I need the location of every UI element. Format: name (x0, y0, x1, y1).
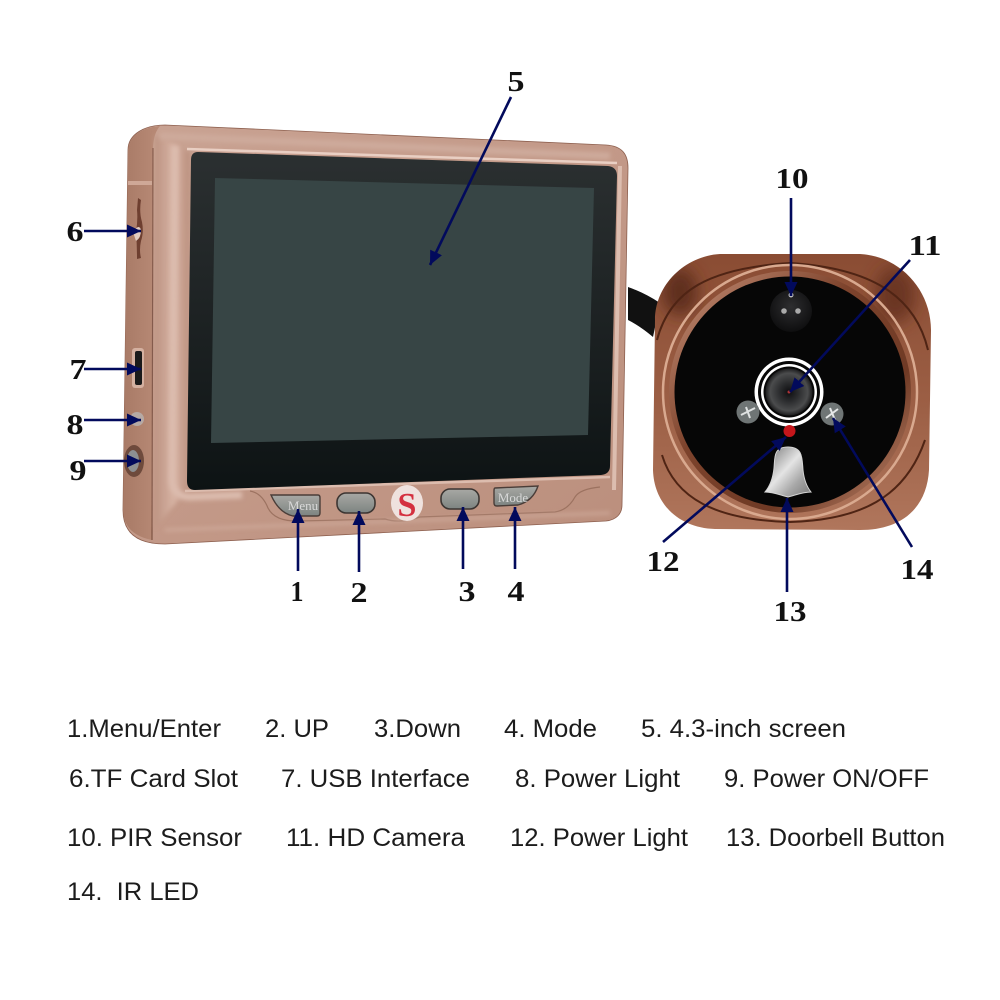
up button (337, 493, 375, 513)
power light (130, 412, 144, 426)
number 5: 5 (508, 66, 524, 98)
number 14: 14 (900, 554, 934, 586)
legend row 3: 13. Doorbell Button (726, 824, 945, 852)
legend row 1: 1.Menu/Enter (67, 715, 221, 743)
IR LED right (820, 402, 844, 426)
callout numbers (66, 66, 942, 628)
number 9: 9 (70, 455, 86, 487)
monitor side panel (123, 126, 160, 540)
monitor device: Mode (498, 490, 528, 505)
bezel highlights (172, 146, 242, 497)
number 6: 6 (66, 216, 84, 248)
arrow 7 (84, 368, 141, 370)
number 12: 12 (646, 546, 680, 578)
legend row 1: 4. Mode (504, 715, 597, 743)
number 10: 10 (776, 163, 808, 195)
legend row 2: 9. Power ON/OFF (724, 765, 929, 793)
power switch (124, 445, 144, 477)
arrows (84, 97, 912, 592)
cable (628, 287, 660, 337)
camera lens (754, 358, 824, 426)
menu button (271, 495, 320, 516)
USB interface (132, 348, 144, 388)
arrow 3 (462, 507, 464, 569)
number 7: 7 (70, 354, 86, 386)
number 8: 8 (66, 409, 84, 441)
black face (674, 276, 906, 508)
housing outlines (657, 263, 928, 350)
arrow 6 (84, 230, 141, 232)
arrow 8 (84, 419, 141, 421)
arrow 10 (790, 198, 792, 296)
monitor body (123, 125, 628, 544)
number 3: 3 (458, 576, 476, 608)
number 2: 2 (350, 577, 368, 609)
legend row 3 (67, 824, 945, 852)
legend row 2 (69, 765, 929, 793)
logo badge (391, 485, 423, 524)
monitor device: Menu (288, 498, 319, 513)
legend row 2: 6.TF Card Slot (69, 765, 238, 793)
PIR sensor (770, 290, 812, 332)
logo badge: S (398, 487, 416, 524)
number 4: 4 (508, 576, 524, 608)
TF card slot (136, 198, 143, 259)
number 11: 11 (908, 230, 942, 262)
legend row 1: 2. UP (265, 715, 329, 743)
legend row 1 (67, 715, 846, 743)
IR LED left (736, 400, 760, 424)
monitor device (123, 125, 628, 544)
legend row 3: 10. PIR Sensor (67, 824, 242, 852)
arrow 2 (358, 511, 360, 572)
highlight ring (663, 265, 917, 519)
arrow 12 (663, 437, 786, 542)
legend row 3: 11. HD Camera (286, 824, 465, 852)
legend row 1: 3.Down (374, 715, 461, 743)
doorbell button (765, 447, 811, 497)
arrow 11 (790, 260, 910, 392)
legend row 4: 14. IR LED (67, 878, 199, 906)
arrow 9 (84, 460, 141, 462)
arrow 13 (786, 498, 788, 592)
legend row 1: 5. 4.3-inch screen (641, 715, 846, 743)
bottom contour (250, 487, 600, 521)
legend row 2: 7. USB Interface (281, 765, 470, 793)
number 13: 13 (774, 596, 806, 628)
legend row 2: 8. Power Light (515, 765, 680, 793)
power indicator (784, 425, 796, 437)
doorbell unit (653, 254, 931, 530)
display area (211, 178, 594, 443)
arrow 1 (297, 509, 299, 571)
mode button (494, 486, 538, 506)
legend row 3: 12. Power Light (510, 824, 688, 852)
bronze housing (653, 254, 931, 530)
black screen glass (187, 152, 617, 490)
legend (67, 715, 945, 906)
number 1: 1 (290, 576, 304, 608)
monitor left bevel (155, 135, 190, 528)
arrow 14 (833, 418, 912, 547)
down button (441, 489, 479, 509)
arrow 5 (430, 97, 511, 265)
arrow 4 (514, 507, 516, 569)
corner shading (662, 267, 915, 323)
